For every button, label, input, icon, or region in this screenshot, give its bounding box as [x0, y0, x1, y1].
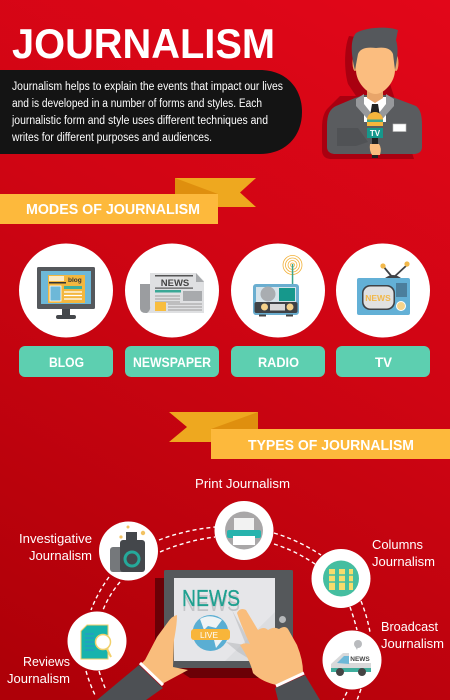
ribbon: modes of journalism: [0, 178, 256, 224]
left hand: [141, 615, 188, 684]
ribbon front: [0, 194, 218, 224]
icon: radio: [253, 256, 302, 316]
right hand: [237, 609, 303, 685]
tablet with hands: LIVE: [200, 630, 218, 640]
button: tv: [336, 346, 430, 377]
dashed connectors: [86, 527, 370, 700]
icon: tv: NEWS: [365, 293, 391, 303]
type: investigative journalism: Journalism: [29, 548, 92, 563]
icon: monitor: blog: [68, 277, 82, 284]
mode: blog: [19, 244, 113, 338]
ribbon: types of journalism: [169, 412, 450, 459]
circle: [68, 612, 126, 670]
intro text: and is developed in a number of forms and styles. Each: [12, 98, 262, 110]
mode: radio: [231, 244, 325, 338]
type: columns journalism: Columns: [372, 537, 423, 552]
circle: [125, 244, 219, 338]
button: newspaper: [125, 346, 219, 377]
left sleeve: [97, 665, 163, 700]
circle: [231, 244, 325, 338]
ribbon fold: [175, 178, 218, 207]
mode: newspaper: [125, 244, 219, 338]
tablet with hands: [97, 570, 320, 700]
mode: tv: [336, 244, 430, 338]
right cuff: [276, 673, 304, 686]
icon: news reporter: [322, 28, 422, 159]
button: radio: RADIO: [258, 354, 299, 370]
ribbon fold: [211, 412, 258, 429]
icon: news van: NEWS: [350, 656, 370, 663]
intro text: [11, 81, 283, 144]
type: investigative journalism: [19, 522, 158, 580]
type: investigative journalism: Investigative: [19, 531, 92, 546]
icon: newspaper: NEWS: [161, 278, 189, 289]
ribbon label: TYPES OF JOURNALISM: [248, 437, 414, 454]
headline reflection: NEWS: [182, 590, 240, 616]
circle: [19, 244, 113, 338]
circle: [214, 501, 274, 560]
ribbon back: [169, 412, 258, 442]
headline: NEWS: [182, 585, 240, 611]
type: broadcast journalism: Journalism: [381, 636, 444, 651]
icon: news reporter: TV: [370, 129, 381, 138]
button: blog: BLOG: [49, 354, 84, 370]
panel: intro: [0, 70, 302, 154]
intro text: journalistic form and style uses different techniques and: [11, 115, 268, 127]
type: columns journalism: Journalism: [372, 554, 435, 569]
title: JOURNALISM: [12, 20, 275, 67]
type: broadcast journalism: [322, 619, 444, 690]
type: broadcast journalism: Broadcast: [381, 619, 438, 634]
intro text: writes for different purposes and audiences.: [11, 132, 212, 144]
icon: printer: [225, 512, 263, 550]
intro text: Journalism helps to explain the events that impact our lives: [12, 81, 283, 93]
tablet shadow: [148, 578, 292, 678]
live badge: [191, 629, 230, 640]
circle: [99, 522, 158, 580]
intro pill: [0, 70, 302, 154]
icon: columns: [323, 560, 359, 596]
tablet button: [279, 616, 286, 623]
button: newspaper: NEWSPAPER: [133, 354, 211, 370]
type: reviews journalism: Journalism: [7, 671, 70, 686]
finger shadow: [226, 610, 253, 660]
ribbon front: [211, 429, 450, 459]
icon: document search: [81, 625, 111, 659]
tablet screen: [174, 578, 275, 661]
circle: [322, 630, 382, 690]
circle: [312, 549, 370, 608]
ribbon label: MODES OF JOURNALISM: [26, 201, 200, 218]
right sleeve: [275, 675, 320, 700]
globe: [192, 615, 228, 651]
type: print journalism: Print Journalism: [195, 476, 290, 491]
button: tv: TV: [375, 354, 393, 370]
circle: [336, 244, 430, 338]
type: columns journalism: [312, 537, 435, 608]
left cuff: [140, 663, 163, 685]
button: radio: [231, 346, 325, 377]
type: reviews journalism: Reviews: [23, 654, 70, 669]
type: reviews journalism: [7, 612, 126, 686]
ribbon back: [175, 178, 256, 207]
icon: camera: [110, 526, 145, 572]
tablet body: [164, 570, 293, 668]
type: print journalism: [195, 476, 290, 560]
button: blog: [19, 346, 113, 377]
